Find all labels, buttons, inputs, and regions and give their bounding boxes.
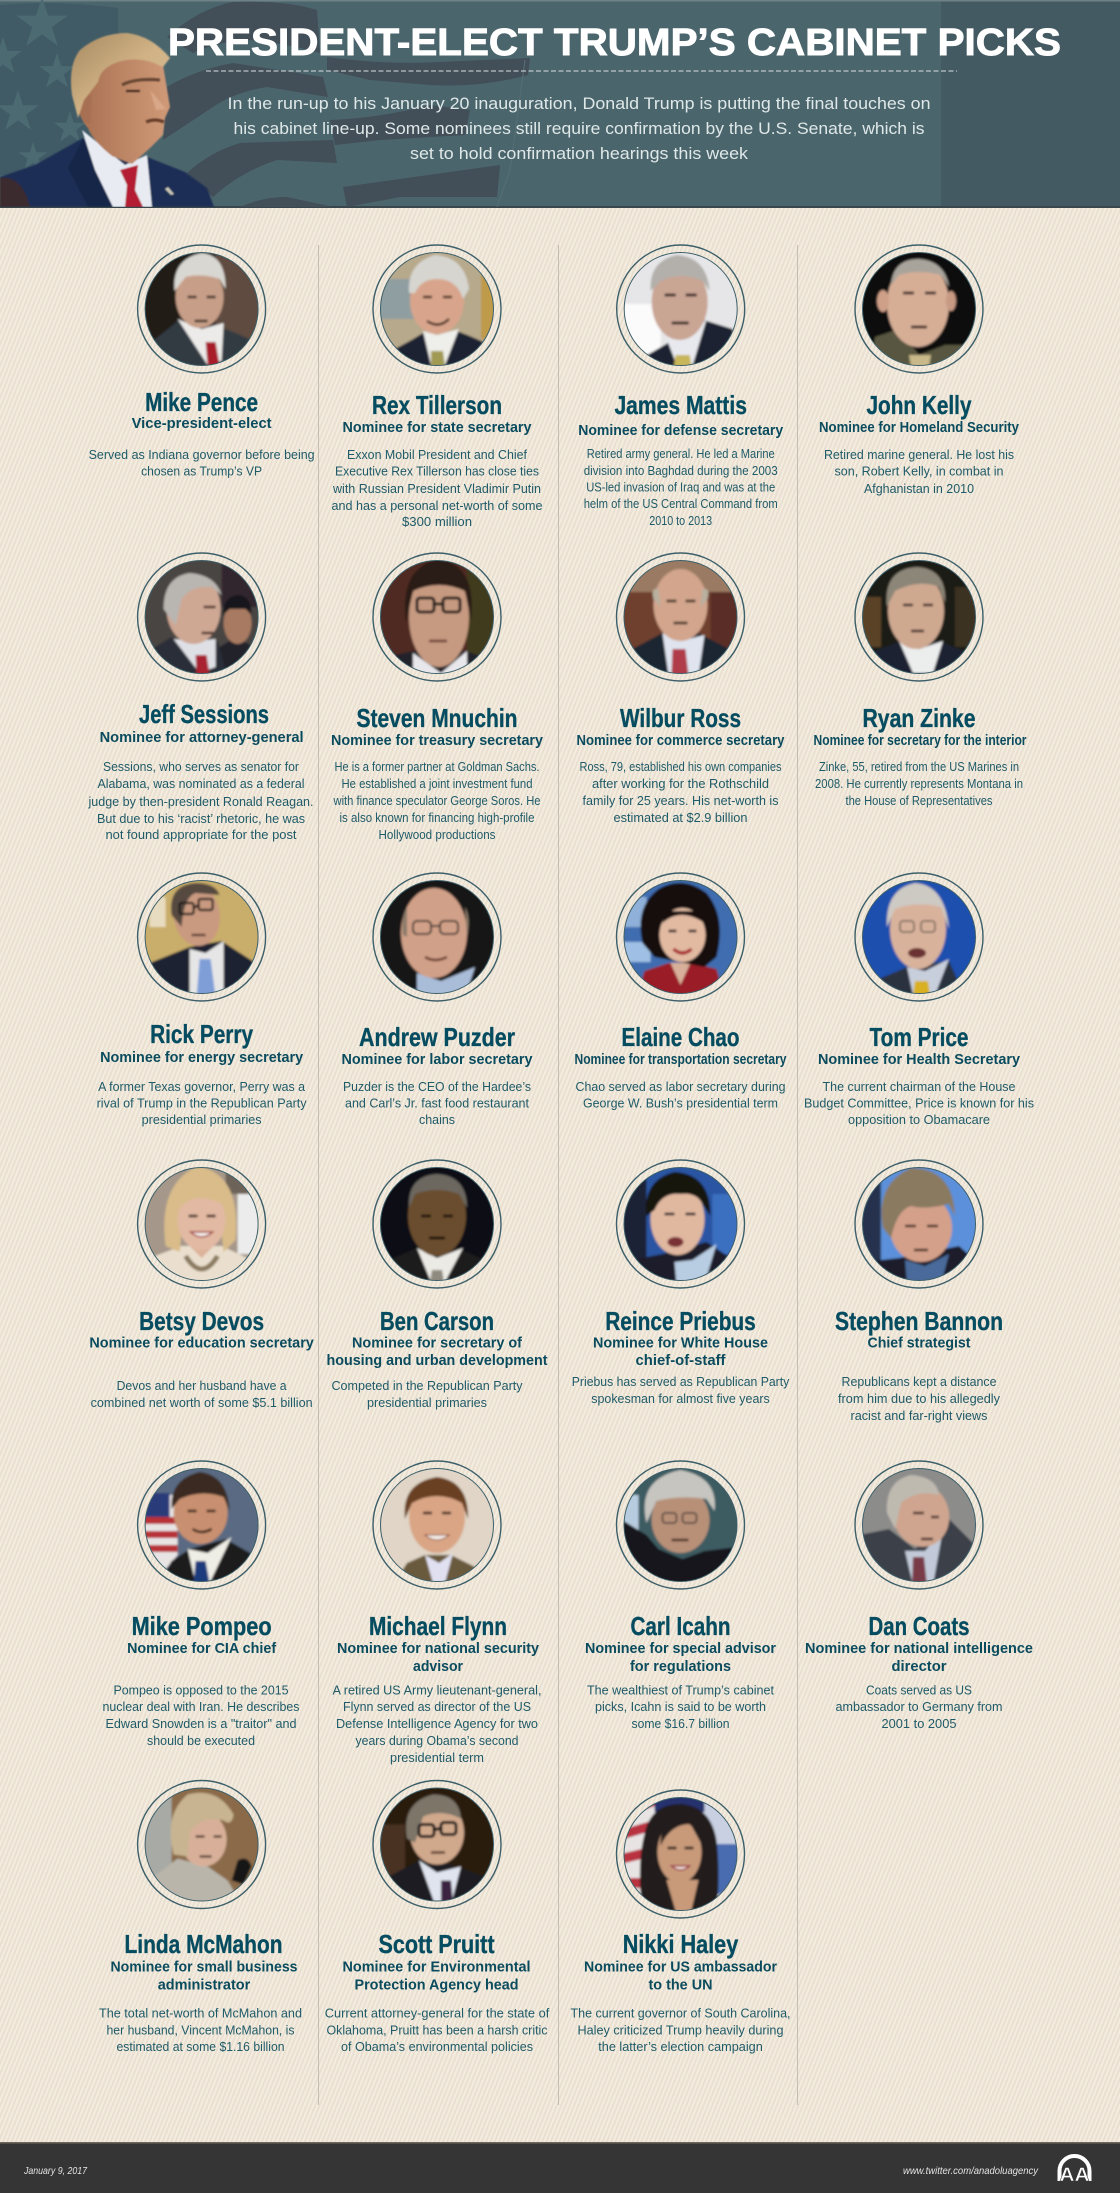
bio: Retired army general. He led a Marine [587,447,775,461]
title: PRESIDENT-ELECT TRUMP’S CABINET PICKS [168,22,1061,64]
bio: A former Texas governor, Perry was a [98,1080,305,1094]
card: James Mattis [578,245,784,528]
role [342,1959,530,1994]
portrait: Carl Icahn [616,1461,744,1589]
bio: He is a former partner at Goldman Sachs. [334,760,540,774]
card: Betsy Devos [89,1160,314,1410]
bio: presidential term [390,1751,484,1765]
role: Nominee for transportation secretary [574,1051,787,1068]
bio: after working for the Rothschild [592,777,769,791]
bio: opposition to Obamacare [848,1113,990,1127]
name: Michael Flynn [369,1611,507,1641]
bio: Executive Rex Tillerson has close ties [335,464,539,478]
role: Nominee for secretary of [352,1334,523,1352]
role [337,1640,540,1675]
name: Tom Price [870,1022,968,1052]
portrait: Elaine Chao [616,873,744,1001]
bio: Priebus has served as Republican Party [572,1375,790,1389]
intro text [228,94,930,163]
bio [570,2007,790,2054]
role: Nominee for state secretary [342,419,532,436]
role [593,1334,768,1369]
bio: division into Baghdad during the 2003 [584,464,778,478]
name: Jeff Sessions [139,699,269,729]
portrait: Ben Carson [373,1160,501,1288]
bio: son, Robert Kelly, in combat in [834,464,1004,478]
portrait: Linda McMahon [138,1780,266,1908]
card: John Kelly [819,245,1020,496]
role: Nominee for secretary for the interior [814,732,1027,749]
card: Tom Price [804,873,1034,1127]
card: Wilbur Ross [576,553,785,825]
bio [332,1379,523,1410]
bio: Alabama, was nominated as a federal [98,777,304,791]
role: chief-of-staff [636,1352,726,1369]
bio [87,760,314,842]
bio [572,1375,790,1406]
bio: spokesman for almost five years [591,1392,770,1406]
card: Mike Pence [89,245,315,478]
card: Dan Coats [805,1461,1033,1731]
bio [333,760,541,842]
role: director [892,1658,947,1675]
role: Nominee for treasury secretary [331,732,544,749]
card: Rick Perry [97,873,307,1127]
role: Nominee for energy secretary [100,1049,304,1066]
name: James Mattis [614,390,747,420]
card: Rex Tillerson [332,245,543,529]
portrait: Tom Price [855,873,983,1001]
card: Andrew Puzder [342,873,533,1127]
portrait: Rex Tillerson [373,245,501,373]
portrait: Reince Priebus [616,1160,744,1288]
portrait: Stephen Bannon [855,1160,983,1288]
card: Nikki Haley [570,1790,790,2054]
bio: chosen as Trump’s VP [141,464,262,478]
bio: some $16.7 billion [632,1717,730,1731]
card: Steven Mnuchin [331,553,544,842]
bio [332,448,543,529]
bio [838,1375,1001,1423]
role: to the UN [648,1977,712,1994]
role: Nominee for US ambassador [584,1959,777,1976]
column divider lines [318,245,798,2105]
name: Reince Priebus [605,1306,756,1336]
bio: presidential primaries [367,1396,487,1410]
bio: Chao served as labor secretary during [576,1080,786,1094]
bio: Haley criticized Trump heavily during [578,2024,784,2038]
bio [580,760,782,825]
name: Linda McMahon [124,1929,282,1959]
bio: The total net-worth of McMahon and [99,2007,302,2021]
name: Andrew Puzder [359,1022,515,1052]
portrait: Ryan Zinke [855,553,983,681]
bio: Oklahoma, Pruitt has been a harsh critic [326,2024,548,2038]
bio: and has a personal net-worth of some [332,499,543,513]
bio: racist and far-right views [850,1409,988,1423]
portrait: James Mattis [617,245,745,373]
role: administrator [158,1977,250,1994]
bio: estimated at some $1.16 billion [116,2040,285,2054]
bio: Served as Indiana governor before being [89,448,315,462]
role [585,1640,776,1675]
bio: the House of Representatives [846,794,992,808]
bio: helm of the US Central Command from [584,497,778,511]
name: Scott Pruitt [378,1929,495,1959]
bio: judge by then-president Ronald Reagan. [87,795,314,809]
bio: Sessions, who serves as senator for [103,760,299,774]
bio: Hollywood productions [378,828,496,842]
bio: Coats served as US [866,1684,972,1698]
bio: Retired marine general. He lost his [824,448,1014,462]
card: Linda McMahon [99,1780,302,2054]
portrait: Scott Pruitt [373,1780,501,1908]
bio [836,1684,1002,1731]
bio: Pompeo is opposed to the 2015 [114,1684,289,1698]
role: housing and urban development [326,1352,548,1369]
bio: George W. Bush’s presidential term [583,1096,778,1110]
role: Nominee for commerce secretary [576,732,785,749]
bio [815,760,1023,808]
portrait: Wilbur Ross [616,553,744,681]
bio: Edward Snowden is a "traitor" and [106,1717,297,1731]
bio: A retired US Army lieutenant-general, [332,1684,542,1698]
bio: picks, Icahn is said to be worth [595,1700,766,1714]
role: Nominee for labor secretary [342,1051,533,1068]
name: Dan Coats [868,1611,970,1641]
name: Mike Pompeo [132,1611,272,1641]
footer date: January 9, 2017 [23,2165,88,2177]
bio [576,1080,786,1110]
intro text: In the run-up to his January 20 inauguration, Donald Trump is putting the final touches on [228,94,930,113]
bio: is also known for financing high-profile [340,811,535,825]
footer bar [0,2142,1120,2193]
bio: from him due to his allegedly [838,1392,1001,1406]
bio [804,1080,1034,1127]
bio: Budget Committee, Price is known for his [804,1096,1034,1110]
card: Reince Priebus [572,1160,790,1406]
intro text: his cabinet line-up. Some nominees still require confirmation by the U.S. Senate, which is [234,119,924,138]
name: Steven Mnuchin [356,703,518,733]
bio: with finance speculator George Soros. He [333,794,541,808]
bio [343,1080,531,1127]
bio: rival of Trump in the Republican Party [97,1096,307,1110]
portrait: John Kelly [855,245,983,373]
role: Nominee for Environmental [342,1959,530,1976]
role: Nominee for small business [110,1959,298,1976]
bio: Competed in the Republican Party [332,1379,523,1393]
name: Carl Icahn [630,1611,730,1641]
bio: Puzder is the CEO of the Hardee’s [343,1080,531,1094]
bio: ambassador to Germany from [836,1700,1002,1714]
bio: combined net worth of some $5.1 billion [91,1396,313,1410]
card: Ben Carson [326,1160,548,1410]
bio [102,1684,300,1748]
bio: Flynn served as director of the US [343,1700,531,1714]
portrait: Andrew Puzder [373,873,501,1001]
bio: presidential primaries [142,1113,262,1127]
footer link: www.twitter.com/anadoluagency [903,2165,1039,2177]
role: Nominee for defense secretary [578,422,784,439]
role: Vice-president-elect [132,415,272,432]
portrait: Donald Trump [0,33,214,207]
role: advisor [413,1658,463,1675]
bio: He established a joint investment fund [342,777,533,791]
name: Mike Pence [145,387,258,417]
name: Stephen Bannon [835,1306,1003,1336]
bio: her husband, Vincent McMahon, is [106,2024,294,2038]
bio: and Carl’s Jr. fast food restaurant [345,1096,530,1110]
flag background [0,0,530,207]
bio [97,1080,307,1127]
bio: family for 25 years. His net-worth is [582,794,778,808]
role: Chief strategist [868,1334,970,1352]
bio: 2001 to 2005 [882,1717,957,1731]
portrait: Nikki Haley [616,1790,744,1918]
bio: should be executed [147,1734,255,1748]
bio: Current attorney-general for the state of [325,2007,550,2021]
bio: US-led invasion of Iraq and was at the [586,480,775,494]
card: Carl Icahn [585,1461,776,1731]
name: Rex Tillerson [372,390,502,420]
role: Nominee for education secretary [89,1334,314,1352]
bio: The current governor of South Carolina, [570,2007,790,2021]
card: Scott Pruitt [325,1780,550,2054]
bio: chains [419,1113,455,1127]
card: Mike Pompeo [102,1461,300,1748]
bio: the latter’s election campaign [598,2040,763,2054]
bio: 2010 to 2013 [649,514,712,528]
bio [584,447,778,528]
bio [587,1684,775,1731]
role: for regulations [630,1658,731,1675]
role: Nominee for attorney-general [100,729,304,746]
bio: Exxon Mobil President and Chief [347,448,528,462]
name: Ben Carson [380,1306,494,1336]
portrait: Dan Coats [855,1461,983,1589]
bio: estimated at $2.9 billion [614,811,748,825]
card: Elaine Chao [574,873,787,1110]
role [326,1334,548,1369]
role [805,1640,1033,1675]
portrait: Betsy Devos [138,1160,266,1288]
bio: not found appropriate for the post [106,828,297,842]
bio: years during Obama’s second [356,1734,519,1748]
role: Nominee for Health Secretary [818,1051,1021,1068]
portrait: Steven Mnuchin [373,553,501,681]
role: Nominee for CIA chief [127,1640,277,1657]
bio [89,448,315,478]
bio: Zinke, 55, retired from the US Marines in [819,760,1019,774]
bio: 2008. He currently represents Montana in [815,777,1023,791]
card: Michael Flynn [332,1461,542,1765]
bio [99,2007,302,2054]
name: Elaine Chao [622,1022,740,1052]
portrait: Michael Flynn [373,1461,501,1589]
icon: Anadolu Agency logo [1060,2156,1090,2186]
portrait: Mike Pompeo [138,1461,266,1589]
card: Stephen Bannon [835,1160,1003,1423]
card: Jeff Sessions [87,553,314,842]
bio [325,2007,550,2054]
bio [824,448,1014,496]
name: John Kelly [866,390,972,420]
role: Nominee for national intelligence [805,1640,1033,1657]
bio: Ross, 79, established his own companies [580,760,782,774]
bio [91,1379,313,1410]
portrait: Jeff Sessions [138,553,266,681]
role: Protection Agency head [354,1977,518,1994]
bio: But due to his ‘racist’ rhetoric, he was [97,812,305,826]
bio: The wealthiest of Trump’s cabinet [587,1684,775,1698]
intro text: set to hold confirmation hearings this week [410,144,749,163]
bio: Republicans kept a distance [842,1375,997,1389]
bio: The current chairman of the House [822,1080,1016,1094]
header banner [0,0,1120,208]
portrait: Mike Pence [138,245,266,373]
card: Ryan Zinke [814,553,1027,808]
role: Nominee for special advisor [585,1640,776,1657]
portrait: Rick Perry [138,873,266,1001]
bio: $300 million [402,515,472,529]
icon: Anadolu Agency logo: AA [1060,2165,1090,2186]
bio: with Russian President Vladimir Putin [332,482,541,496]
bio: of Obama’s environmental policies [341,2040,533,2054]
name: Nikki Haley [623,1929,739,1959]
bio [332,1684,542,1765]
name: Wilbur Ross [620,703,741,733]
name: Rick Perry [150,1019,254,1049]
role: Nominee for national security [337,1640,540,1657]
bio: Devos and her husband have a [117,1379,287,1393]
bio: Afghanistan in 2010 [864,482,974,496]
name: Betsy Devos [139,1306,264,1336]
name: Ryan Zinke [862,703,976,733]
role [110,1959,298,1994]
role: Nominee for White House [593,1334,768,1352]
bio: Defense Intelligence Agency for two [336,1717,538,1731]
bio: nuclear deal with Iran. He describes [102,1700,300,1714]
role [584,1959,777,1994]
role: Nominee for Homeland Security [819,419,1020,436]
